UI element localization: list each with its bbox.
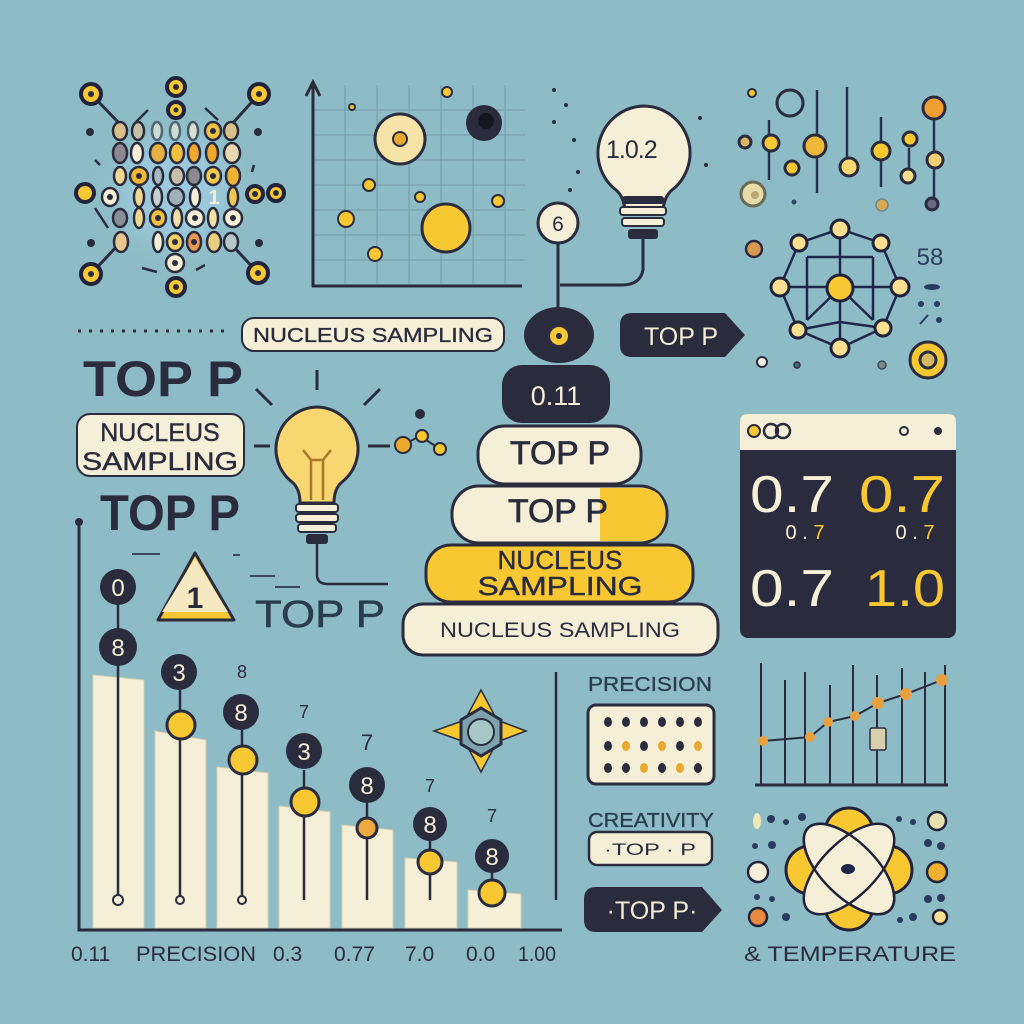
pyramid layer: top p half yellow: TOP P xyxy=(508,493,608,529)
marker numbers: 7 xyxy=(299,702,309,722)
axis labels: 7.0 xyxy=(405,943,434,966)
precision dots card xyxy=(588,705,714,784)
label: nucleus sampling box: SAMPLING xyxy=(82,448,238,476)
line chart: lower right xyxy=(755,663,948,785)
pyramid layer: nucleus sampling yellow xyxy=(426,545,693,602)
tag: top p arrow xyxy=(620,313,745,357)
tag: top p arrow lower xyxy=(584,887,722,932)
axis labels: 0.77 xyxy=(334,943,375,966)
axis labels: PRECISION xyxy=(136,943,256,966)
creativity pill xyxy=(589,832,712,865)
numbered node: 6 xyxy=(538,203,578,308)
pyramid base: nucleus sampling cream xyxy=(403,604,718,655)
pyramid layer: 0.11 xyxy=(502,365,610,423)
marker numbers: 7 xyxy=(425,776,435,796)
lightbulb with 1.0.2 label: 1.0.2 xyxy=(606,136,657,164)
dark panel: values: 0 . 7 xyxy=(786,522,824,544)
marker numbers: 8 xyxy=(111,635,125,662)
axis labels xyxy=(71,943,556,966)
slider icons: top right xyxy=(739,87,945,211)
marker numbers: 7 xyxy=(487,806,497,826)
network polygon: right: 58 xyxy=(917,244,943,271)
pyramid base: nucleus sampling cream: NUCLEUS SAMPLING xyxy=(440,619,680,642)
stacked pyramid xyxy=(403,307,718,655)
outer nodes xyxy=(76,78,284,296)
lightbulb with 1.0.2 label xyxy=(552,88,708,285)
dark panel: values: 0.7 xyxy=(859,466,945,524)
pyramid layer: top p half yellow xyxy=(452,486,667,543)
label: nucleus sampling pill xyxy=(242,318,504,351)
network polygon: right xyxy=(746,220,946,378)
axis labels: 0.0 xyxy=(466,943,495,966)
gear diamond icon xyxy=(434,690,526,772)
label: temperature: & TEMPERATURE xyxy=(744,943,956,966)
pyramid layer: top p cream xyxy=(478,426,641,484)
axis labels: 0.3 xyxy=(273,943,302,966)
dark panel: values: 0.7 xyxy=(750,560,834,618)
pyramid layer: nucleus sampling yellow: NUCLEUS xyxy=(498,545,622,575)
lollipop markers xyxy=(99,569,509,873)
dark panel: values: 0.7 xyxy=(750,466,834,524)
label: creativity: CREATIVITY xyxy=(588,810,714,832)
label: nucleus sampling box xyxy=(77,414,244,476)
marker numbers: 8 xyxy=(360,773,374,800)
digit pills xyxy=(102,122,242,272)
label: nucleus sampling box: NUCLEUS xyxy=(100,419,220,447)
marker numbers: 0 xyxy=(111,575,125,602)
atom flower icon xyxy=(748,808,947,930)
lightbulb icon: centre left xyxy=(254,370,446,584)
tag: top p arrow lower: ·TOP P· xyxy=(607,897,697,925)
warning triangle icon xyxy=(132,553,300,620)
label: nucleus sampling pill: NUCLEUS SAMPLING xyxy=(253,325,493,347)
bars xyxy=(93,675,521,928)
dark panel: values: 1.0 xyxy=(865,560,945,618)
creativity pill: ·TOP · P xyxy=(604,840,696,859)
marker numbers: 8 xyxy=(423,812,437,839)
axis labels: 1.00 xyxy=(518,943,556,966)
vertical divider xyxy=(555,672,557,900)
network diagram: top left xyxy=(76,78,284,296)
pyramid top: dark node xyxy=(524,307,594,363)
marker numbers: 8 xyxy=(237,662,247,682)
marker numbers: 7 xyxy=(361,730,373,755)
bar chart: precision xyxy=(71,518,562,966)
marker numbers xyxy=(111,575,499,871)
heading: top p: TOP P xyxy=(83,351,243,407)
label: precision: PRECISION xyxy=(588,674,712,696)
network diagram: top left: 1 xyxy=(208,187,220,209)
lollipop stems xyxy=(118,590,492,900)
axis labels: 0.11 xyxy=(71,943,110,966)
tag: top p arrow: TOP P xyxy=(644,323,718,351)
marker numbers: 3 xyxy=(172,660,186,687)
numbered node: 6: 6 xyxy=(552,213,564,236)
pyramid layer: nucleus sampling yellow: SAMPLING xyxy=(478,571,642,601)
dark panel: values xyxy=(740,414,956,638)
marker numbers: 3 xyxy=(297,739,311,766)
dark panel: values: 0 . 7 xyxy=(896,522,934,544)
pyramid layer: top p cream: TOP P xyxy=(510,435,610,471)
label: top p lower: TOP P xyxy=(255,594,385,636)
scatter chart: top centre xyxy=(306,82,525,286)
marker numbers: 8 xyxy=(485,844,499,871)
warning triangle icon: 1 xyxy=(187,582,203,615)
marker numbers: 8 xyxy=(234,700,248,727)
heading: top p second: TOP P xyxy=(100,485,240,541)
pyramid layer: 0.11: 0.11 xyxy=(531,381,581,411)
